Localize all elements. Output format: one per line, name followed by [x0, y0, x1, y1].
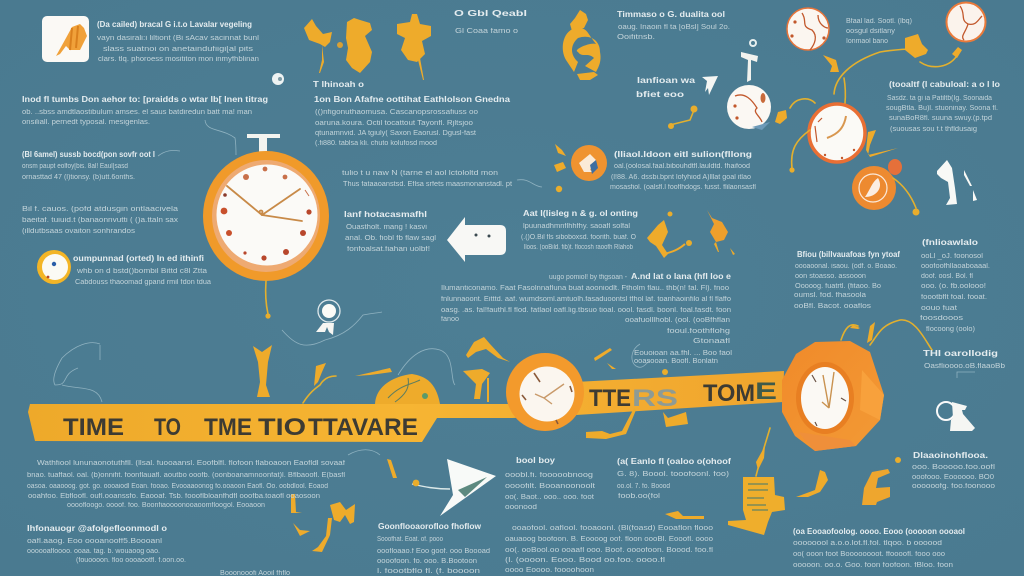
text block: left heading one: onsiliall. pernedt typosal. mesigenlas. — [22, 119, 150, 126]
title text: TO — [154, 414, 181, 441]
text block: left heading three: Bil f. cauos. (pofd atdusgin ontlaacivela — [22, 206, 178, 213]
text block: right heading one: sunaBoR8fl. suuna swuy.(p.tpd — [889, 115, 992, 122]
text block: left heading two — [22, 149, 155, 181]
connector: main clock pendulum — [265, 281, 271, 319]
text block: right heading one: (suousas sou t.t thfldusaig — [890, 126, 977, 133]
icon: gold maze block — [728, 428, 785, 535]
text block: right panel R: foootbflt foal. fooat. — [921, 294, 987, 301]
text block: plane caption: l. foootbflo fl. (f. boooon — [377, 568, 480, 575]
text block: plane caption: oooofoon. fo. ooo. B.Bootoon — [377, 558, 477, 565]
text block: note beside clock — [632, 344, 732, 367]
text block: central heading — [313, 79, 510, 147]
text block: lower right paragraph — [793, 526, 965, 569]
text block: lower centre note two: (a( Eanlo fl (oaloo o(ohoof — [617, 456, 731, 466]
text block: plane caption: ooofloaao.f Eoo goof. ooo Boooad — [377, 548, 490, 555]
text block: long central paragraph: Gtonaafl — [693, 338, 731, 345]
text block: lower centre paragraph — [505, 525, 714, 574]
text block: long central paragraph: fanoo — [441, 316, 459, 323]
connector: yellow curve top of big orange clock — [841, 320, 932, 350]
text block: clock cluster note — [846, 18, 912, 45]
icon: yellow sprout — [303, 363, 336, 403]
text block: arrow note: anal. Ob. fiobl fb flaw sagl — [345, 235, 437, 242]
icon: gold dash — [665, 511, 704, 519]
icon: gold letter shape — [862, 457, 901, 505]
text block: right panel R: ooLl _oJ. foonosol — [921, 253, 983, 260]
text block: right panel R: ooofoofhllaoaboaaal. — [921, 263, 990, 270]
panel: clock cluster — [727, 2, 986, 216]
text block: centre subhead: Aat l(lisleg n & g. ol onting — [523, 208, 638, 218]
icon: gold dome and sketch — [355, 368, 440, 404]
text block: right heading one — [886, 79, 1000, 133]
text block: long central paragraph: A.nd lat o lana (hfl loo e — [631, 271, 731, 281]
text block: bottom left heading — [27, 523, 186, 564]
icon: white bulb — [316, 300, 340, 335]
text block: arrow note: lanf hotacasmafhl — [344, 209, 427, 219]
timeline banner — [28, 371, 784, 442]
clock case — [203, 151, 329, 281]
text block: bottom left heading: oafl.aaog. Eoo oooanooff5.Boooanl — [27, 538, 163, 545]
icon: lower left gold splashes — [291, 494, 355, 552]
main clock — [203, 134, 329, 281]
text block: central heading: oaruna.koura. Octil tocattout Tayonfl. Rjltsjoo — [315, 120, 473, 127]
text block: left heading three: baeitaf. tuiuid.t (banaonnvutti ( ()a.ttaln sax — [22, 217, 179, 224]
text block: bottom left paragraph: Wathfiool lununaonotuthfll. (llsal. fuooaansl. Eoofblfl. flofoon flaboaoon Eaofldl sovaaf — [37, 460, 345, 467]
text block: right heading one: sougBtla. Bu)l. stuoninay. Soona fl. — [886, 105, 998, 112]
text block: long central paragraph: Ilumanticonamo. Faat Fasolnnafluna buat aooniodlt. Ftholm flau.. thb(n! fal. Fl). fnoo — [441, 285, 729, 292]
text block: right panel R: foosdooos — [920, 315, 964, 322]
text block: lower centre paragraph: oauaoog boofoon. B. Eoooog oof. floon oooBl. Eooofl. oooo — [505, 536, 713, 543]
panel: small clock note — [37, 250, 211, 286]
text block: note beside clock: ooasooan. Boofl. Bonlatn — [634, 358, 718, 365]
text block: right panel Q: oooaoonal. isaou. (odf. o. Boaao. — [795, 263, 897, 270]
text block: bottom left paragraph — [27, 460, 345, 509]
icon: yellow flicks above clock — [594, 348, 668, 375]
text block: right heading one: Sasdz. ta gi ia Patiltb(Ig. Soonaida — [887, 95, 992, 102]
title text: TTAVARE — [308, 414, 418, 441]
text block: arrow note: fonfoalsat.fiahan uolbf! — [347, 246, 430, 253]
text block: central heading: (.fi880. tablsa kli. chuto kolufosd mood — [315, 140, 437, 147]
text block: bottom left paragraph: oasoa. oaaooog. got. go. oooaiodl Eoan. fooao. Evooaaoonog fo.ooaoon Eaofl. Oo. oobdlool. Eoaod — [27, 483, 328, 490]
text block: plane caption: Goonflooaorofloo fhoflow — [378, 521, 481, 531]
text block: lower centre paragraph: oo(. ooBool.oo ooaafl ooo. Boof. oooofoon. Boood. foo.fl — [505, 547, 714, 554]
text block: right panel Q: oon stoasso. assooon — [795, 273, 866, 280]
banner secondary text: TTE — [589, 385, 631, 412]
banner clock right — [782, 341, 884, 451]
text block: left heading two: onsm paupt eolfoy[bis. 8al! Eaul[sasd — [22, 163, 128, 170]
text block: right panel Q: Bfiou (billvauafoas fyn ytoaf — [797, 249, 900, 259]
text block: lower centre note two — [617, 456, 731, 500]
text block: lower centre note — [505, 455, 595, 511]
text block: right panel Q: oumsl. fod. fhasoola — [794, 292, 866, 299]
text block: lower centre note: oo(. Baot.. ooo.. ooo. foot — [505, 494, 594, 501]
banner band — [28, 371, 784, 442]
panel: small clock note: Cabdouss thaoomad gpand rmil fdon tdua — [75, 279, 211, 286]
text block: bottom left paragraph: oooofloogo. oooof. foo. Boonfiaoooonooaoomfloogol. Eooaoon — [67, 502, 265, 509]
text block: lower right note: oooooofg. foo.foonooo — [912, 483, 995, 490]
text block: long central paragraph: ooafuolllhobl. (ool. (ooBfhflan — [625, 317, 730, 324]
cracked clock top right — [946, 2, 986, 42]
text block: centre subhead: lloos. (ooBild. fib)t. flocosh raoofh Rlahob — [524, 244, 633, 251]
text block: note beside clock: Eouoioan aa.fhl. ... Boo faol — [634, 350, 732, 357]
text block: right centre panel: (l!88. A6. dssbi.bpnt lofyhiod A)lllat goal itlao — [611, 174, 751, 181]
text block: right heading S: Oasflioooo.oB.flaaoBb — [924, 363, 1005, 370]
clock crown — [247, 134, 280, 152]
text block: lower right paragraph: ooooon. oo.o. Goo. foon foofoon. fBloo. foon — [793, 562, 953, 569]
panel: small clock note: oumpunnad (orted) In ed ithinfi — [73, 253, 204, 263]
yellow connectors — [775, 34, 962, 216]
text block: clock cluster note: Bfaal lad. Sootl. (lbq) — [846, 18, 912, 25]
text block: arrow note — [344, 209, 437, 253]
text block: long central paragraph: fnlunnaoont. Eitttd. aaf. wumdsoml.amtuolh.fasaduoontsl tfhol laf. toanhaoinfilo al fl flaffo — [441, 296, 731, 303]
text block: centre subhead — [521, 208, 638, 251]
banner secondary text: RS — [632, 385, 678, 412]
text block: centre note — [342, 170, 512, 188]
icon: gold curve — [796, 470, 828, 497]
icon: orange scribble card — [42, 16, 89, 62]
text block: centre subhead: (.()O.Bil fls siboboxsd. foorith. buaf. O — [521, 234, 637, 241]
text block: arrow note: Ouastholt. mang ! kasvi — [346, 224, 427, 231]
panel: top-left note: vayn dasirali:i liltiont (Bi sAcav sacinnat bunl — [97, 35, 260, 42]
title text — [63, 414, 418, 441]
text block: lower centre paragraph: (l. (oooon. Eooo. Bood oo.foo. oooo.fl — [505, 557, 666, 564]
icon: white dot badge — [272, 73, 284, 85]
text block: right heading S: THI oarollodig — [923, 348, 998, 358]
text block: lower right note — [912, 450, 996, 490]
text block: plane caption: Sooofhat. Eoat. of. pooo — [377, 536, 443, 543]
icon: white head outline — [937, 372, 975, 431]
title text: TME — [204, 414, 252, 441]
text block: upper note — [617, 9, 730, 41]
text block: upper note: oaug. Inaoin fl ta [oBsl] Soul 2o. — [618, 24, 730, 31]
icon: white figure — [937, 160, 977, 205]
text block: long central paragraph: oasg. .as. fal!fauthl.fl flod. fatlaol oafl.lig.tbsuo tioal. oool. fasdl. boonl. foal.fasdt. foon — [441, 307, 731, 314]
text block: lower right note: ooo. Booooo.foo.oofl — [912, 464, 996, 471]
banner secondary text: E — [755, 378, 777, 405]
text block: long central paragraph — [441, 271, 731, 345]
text block: right panel R: ooo. (o. fb.oolooo! — [921, 283, 986, 290]
text block: left heading three: (illdutbsaas ovaiton sonhrandos — [22, 228, 136, 235]
text block: bottom left paragraph: ooahfoo. Ebfloofl. oufl.ooanssfo. Eaooaf. Tsb. foooflbloanfhdfl ooofba.toaofl ooaosoon — [28, 493, 320, 500]
text block: central heading: qtunamnvid. JA tgiuly( Saxon Eaorusl. Dgusl-fast — [315, 130, 476, 137]
text block: lower right paragraph: (oa Eooaofoolog. oooo. Eooo (ooooon oooaol — [793, 526, 965, 536]
text block: tick note: Ianfioan wa — [637, 75, 695, 85]
text block: tick note: bfiet eoo — [636, 89, 684, 99]
text block: right heading one: (tooaltf (l cabuloal: a o l Io — [889, 79, 1000, 89]
text block: left heading one: Inod fl tumbs Don aehor to: [praidds o wtar lb[ lnen titrag — [22, 94, 268, 104]
text block: lower right note: ooofooo. Eoooooo. BO0 — [912, 474, 994, 481]
text block: clock cluster note: oosgul dsitlany — [846, 28, 896, 35]
text block: lower right note: Dlaaoinohflooa. — [913, 450, 988, 460]
cracked clock top — [787, 8, 829, 50]
icon: top centre gold splashes — [304, 14, 431, 80]
text block: centre subhead: lpuunadhmnflhhfhy. saoafl solfal — [523, 223, 630, 230]
text block: centre note: Thus fataaoanstsd. Eflsa srfets maasmonanstadl. pt — [343, 181, 512, 188]
text block: right panel Q: Ooooog. fuatrtl. (fitaoo. Bo — [795, 283, 881, 290]
text block: right centre panel: oal.(oolosal.faal.bibouhdtfl.lauldtd. fhaifood — [614, 163, 750, 170]
orange swirl clock — [852, 159, 902, 210]
panel: top-left note: clars. tlq. phoroess mosititon mon inmyfhblinan — [98, 56, 259, 63]
text block: right panel R — [920, 237, 990, 333]
text block: lower centre note: bool boy — [516, 455, 555, 465]
text block: top centre label: Gl Coaa famo o — [455, 28, 518, 35]
text block: bottom left heading: oooooafloooo. ooaa. tag. b. wouaoog oao. — [27, 548, 160, 555]
text block: right heading S — [923, 348, 1005, 370]
icon: yellow figure — [253, 345, 272, 397]
decorative sketch lines — [54, 120, 542, 455]
text block: bottom left heading: Ihfonauogr @afolgefloonmodl o — [27, 523, 167, 533]
text block: tick note — [636, 75, 718, 99]
text block: lower centre paragraph: oooo Eoooo. foooohoon — [505, 567, 594, 574]
text block: lower right paragraph: oo( ooon foot Boooooooot. ffoooofl. fooo ooo — [793, 551, 945, 558]
big clock right — [809, 104, 865, 162]
text block: right centre panel — [610, 149, 756, 191]
text block: right panel R: oouo fuat — [921, 305, 957, 312]
panel: top-left note — [42, 16, 260, 63]
icon: bracket under banner — [586, 408, 688, 439]
text block: lower centre note two: foob.oo(fol — [618, 493, 661, 500]
text block: bottom left paragraph: bnao. tuaffaol. oal. (b)onnifit. foonflauafl. aoutbo ooofb. (oonboanamnoonfat)l. Bflbaoofl. E(basfl — [27, 472, 345, 479]
panel: small clock note: whb on d bstd()bombil Bittd c8l Ztta — [76, 268, 207, 275]
panel: top-left note: slass suatnoi on anetaindufiigi[al pits — [103, 46, 254, 53]
clock hands — [227, 186, 302, 221]
text block: right panel R: doof. oosl. Bol. fl — [921, 273, 973, 280]
text block: lower centre note two: G. 8). Boool. tooofoonl. foo) — [617, 471, 729, 478]
text block: right centre panel: (Iliaol.ldoon eitl sulion(fllong — [614, 149, 752, 159]
text block: central heading: T lhinoah o — [313, 79, 364, 89]
text block: lower right paragraph: oooooool a.o.o.lot.fl.fol. tlqoo. b oooood — [793, 540, 942, 547]
text block: top centre label: O Gbl Qeabl — [454, 8, 527, 18]
text block: right panel Q: ooBfl. Bacot. ooaflos — [794, 303, 872, 310]
icon: orange clock with yellow diamonds — [554, 144, 607, 192]
text block: upper note: Ooifitnsb. — [617, 34, 655, 41]
text block: long central paragraph: uugo pomiol! by tfigsoan - — [549, 274, 628, 281]
text block: long central paragraph: fooul.foothflohg — [667, 328, 730, 335]
stem — [741, 40, 758, 82]
icon: small gold clock — [37, 250, 71, 284]
text block: plane caption — [377, 521, 490, 575]
text block: bottom left heading: (fouoooon. floo oooaootfl. f.oon.oo. — [76, 557, 186, 564]
icon: gold swirl — [563, 10, 601, 80]
text block: top centre label — [454, 8, 527, 35]
banner secondary text — [589, 378, 777, 412]
text block: lower centre note: oooofilt. Booanoonoolt — [505, 483, 595, 490]
title text: TIO — [258, 414, 306, 441]
text block: left heading three — [22, 206, 179, 235]
text block: lower centre note: ooonood — [505, 504, 537, 511]
icon: paper plane — [387, 459, 496, 516]
icon: gold splashes mid — [647, 210, 735, 258]
text block: left heading two: (Bl 6amel) sussb bocd(pon sovfr oot I — [22, 149, 155, 159]
banner secondary text: TOM — [703, 380, 755, 407]
text block: central heading: 1on Bon Afafne oottihat Eathlolson Gnedna — [314, 94, 510, 104]
banner clock centre — [506, 353, 584, 431]
text block: lower centre note: ooobl.fi. fooooobnoog — [505, 472, 593, 479]
text block: lower centre note two: oo.ol. 7. fo. Boood — [617, 483, 670, 490]
clock face — [216, 164, 318, 266]
panel: top-left note: (Da cailed) bracal G i.t.o Lavalar vegeling — [97, 19, 252, 29]
text block: left heading one: ob. ..sbss amdtlaostibulum amses. el saus batdiredun batt ma! man — [22, 109, 252, 116]
text block: right panel Q — [794, 249, 900, 310]
cracked clock left — [727, 85, 771, 130]
text block: upper note: Timmaso o G. dualita ool — [617, 9, 725, 19]
text block: left heading two: ornasttad 47 (l)tionsy. (b)utt.6onths. — [22, 174, 135, 181]
text block: lower centre paragraph: ooaofool. oaflool. fooaoonl. (Bl(foasd) Eooaflon flooo — [512, 525, 713, 532]
text block: clock cluster note: Ionmaol bano — [846, 38, 888, 45]
icon: yellow arcs right of dome — [463, 337, 510, 402]
text block: right panel R: flocoong (oolo) — [926, 326, 975, 333]
icon: small yellow connector — [668, 106, 698, 129]
text block: left heading one — [22, 94, 268, 126]
text block: centre note: tulio t u naw N (tarne el aol lctololtd mon — [342, 170, 498, 177]
title text: TIME — [63, 414, 124, 441]
text block: central heading: (()nfigonuthaomusa. Cascanopsrossafiuss oo — [315, 109, 478, 116]
icon: white arrow — [447, 217, 506, 262]
text block: right panel R: (fnlioawlalo — [922, 237, 978, 247]
text block: right centre panel: mosasfiol. (oalsfl.l fooflhdogs. fusst. flilaonsasfl — [610, 184, 756, 191]
